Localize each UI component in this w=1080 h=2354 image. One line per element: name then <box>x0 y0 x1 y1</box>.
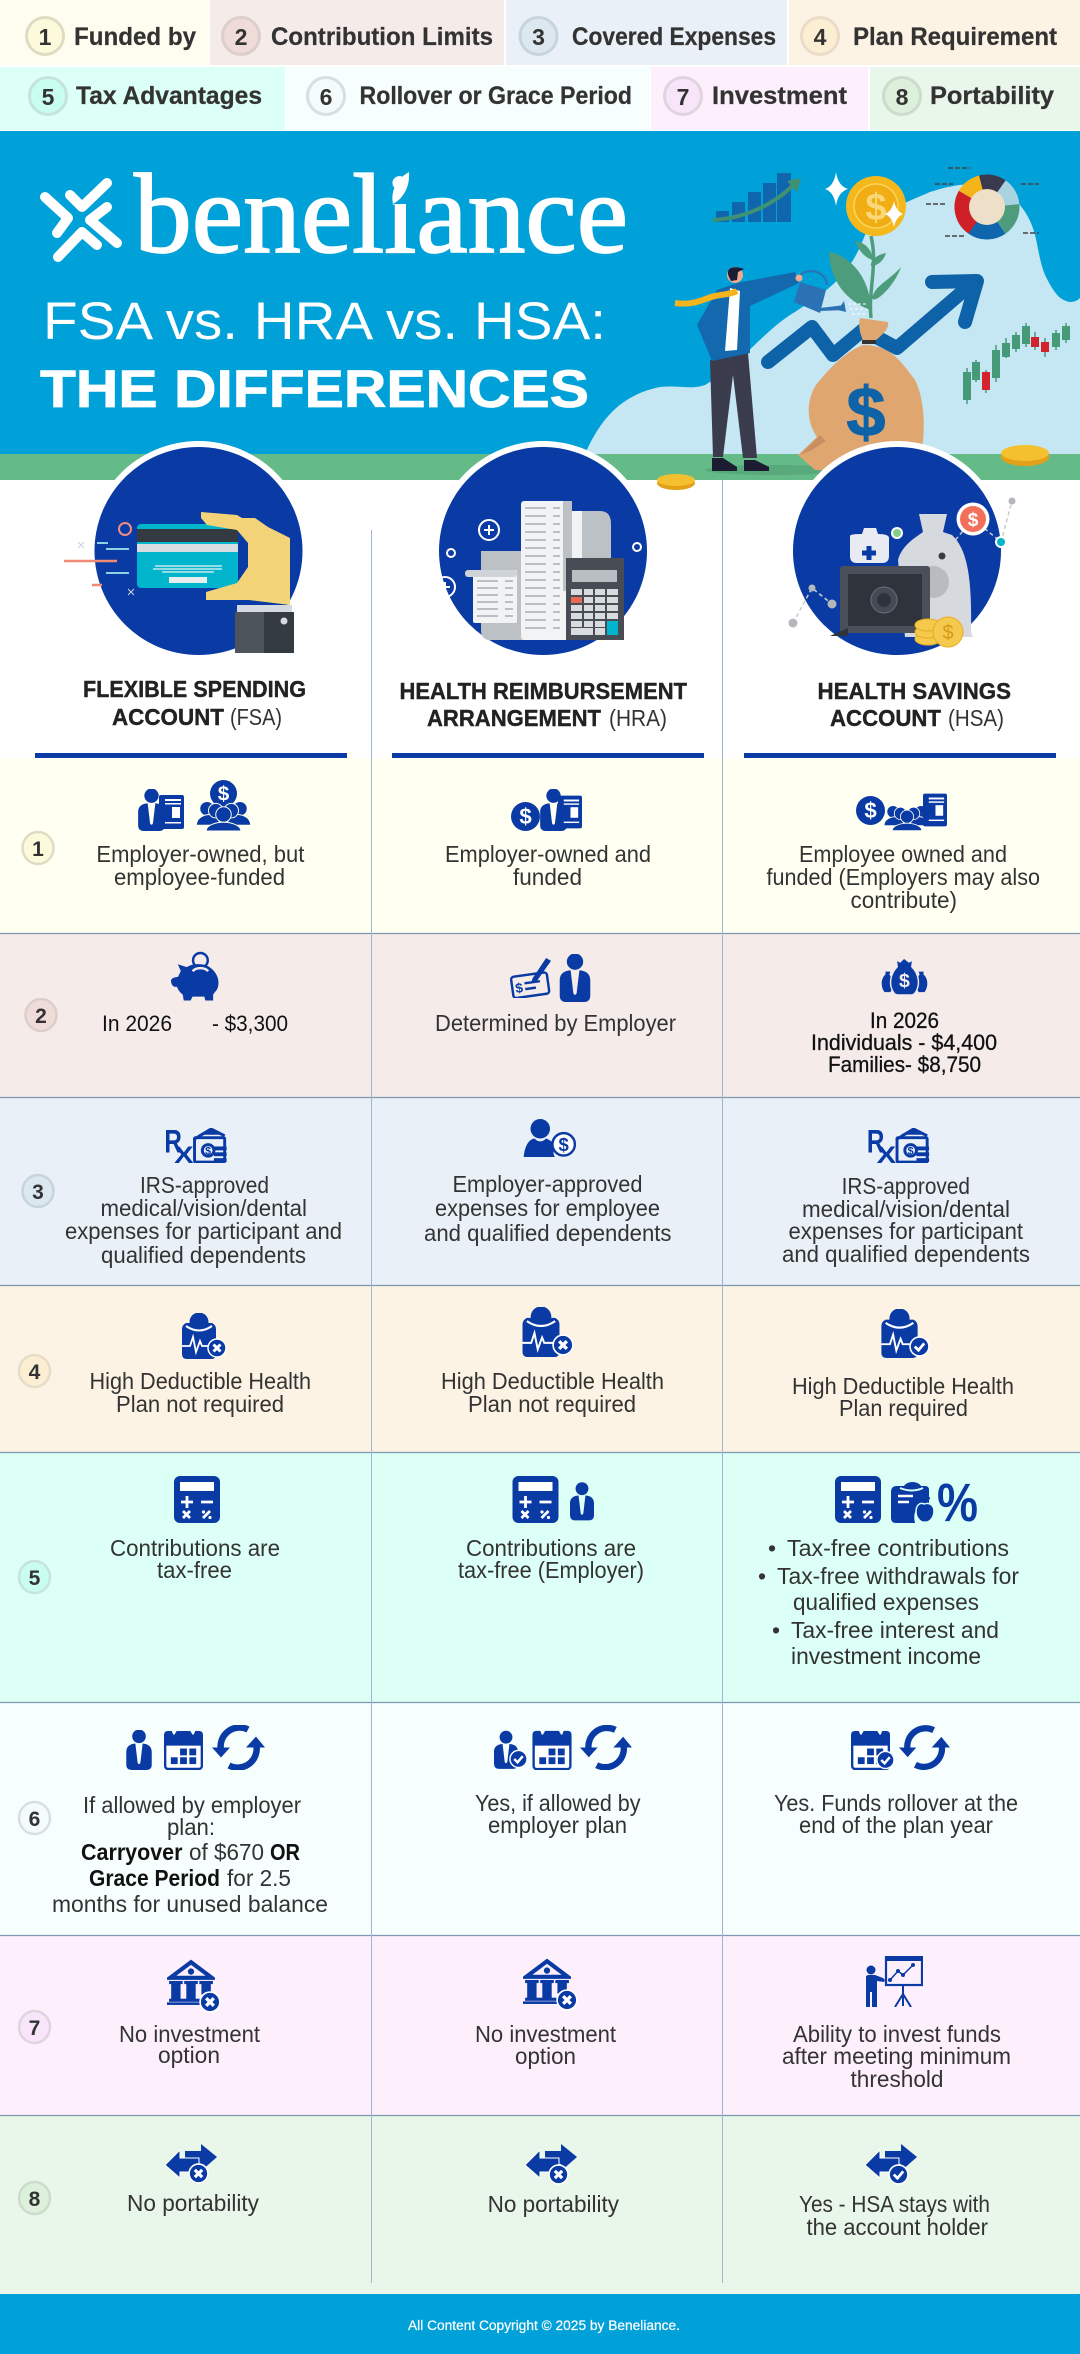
FSA plan requirement: Plan not required <box>116 1391 284 1417</box>
topic 2: contribution limits: 2 <box>235 24 247 50</box>
FSA rollover: of $670 <box>189 1839 264 1865</box>
HRA tax advantages <box>458 1476 644 1583</box>
HSA portability: Yes - HSA stays with <box>799 2191 990 2217</box>
row 6: rollover or grace period <box>19 1728 1018 1917</box>
shoes <box>712 458 769 471</box>
column heading: HRA: ARRANGEMENT <box>427 705 602 731</box>
topic 8: portability <box>870 67 1080 130</box>
HSA investment: threshold <box>850 2066 944 2092</box>
logo mark <box>45 183 117 257</box>
hand <box>796 274 802 282</box>
HSA tax advantages: • <box>772 1617 780 1643</box>
FSA investment: option <box>158 2042 220 2068</box>
HSA expenses: IRS-approved <box>842 1173 970 1199</box>
FSA rollover: OR <box>270 1839 300 1865</box>
HSA funded by: Employee owned and <box>799 841 1007 867</box>
row number 7: 7 <box>29 2017 40 2040</box>
FSA funded by <box>96 780 305 890</box>
FSA funded by: Employer-owned, but <box>96 841 305 867</box>
topic 3: covered expenses: 3 <box>532 24 545 50</box>
topic 5: tax advantages: 5 <box>42 84 55 110</box>
HRA expenses <box>424 1119 672 1246</box>
HSA plan requirement <box>792 1308 1014 1421</box>
row number 3: 3 <box>32 1181 44 1204</box>
row backgrounds <box>0 758 1080 2294</box>
watering can <box>794 271 868 314</box>
column heading: HRA <box>400 678 688 731</box>
logo leaf <box>384 172 409 204</box>
HSA tax advantages: • <box>768 1535 776 1561</box>
row 8: portability <box>19 2144 990 2240</box>
topic 6: rollover or grace period <box>286 67 650 130</box>
row 5: tax advantages <box>19 1473 1019 1669</box>
donut chart illustration <box>926 168 1039 242</box>
HSA plan requirement: Plan required <box>839 1395 968 1421</box>
row number 1 <box>22 832 54 864</box>
coin on ground <box>1001 445 1049 466</box>
FSA tax advantages <box>110 1476 280 1583</box>
gold coin on plant: $ <box>865 187 887 229</box>
FSA tax advantages: Contributions are <box>110 1535 280 1561</box>
HSA expenses: and qualified dependents <box>782 1241 1030 1267</box>
row number 1: 1 <box>32 838 44 861</box>
FSA expenses: medical/vision/dental <box>100 1195 307 1221</box>
title line 2: THE DIFFERENCES <box>40 360 589 419</box>
HSA funded by <box>766 794 1040 913</box>
HRA investment: option <box>515 2043 576 2069</box>
HSA tax advantages: investment income <box>791 1643 981 1669</box>
growth arrow <box>768 281 977 362</box>
FSA rollover: If allowed by employer <box>83 1792 301 1818</box>
HRA tax advantages: Contributions are <box>466 1535 636 1561</box>
HRA plan requirement: High Deductible Health <box>441 1368 664 1394</box>
row number 8 <box>19 2182 50 2214</box>
head <box>727 267 743 283</box>
HRA limit: Determined by Employer <box>435 1010 676 1036</box>
HRA column badge <box>433 441 653 661</box>
row number 2: 2 <box>35 1005 47 1028</box>
topic 5: tax advantages: Tax Advantages <box>76 82 262 110</box>
HSA limit <box>811 958 997 1077</box>
HRA expenses: expenses for employee <box>435 1195 660 1221</box>
HSA plan requirement: High Deductible Health <box>792 1373 1014 1399</box>
HSA funded by: funded (Employers may also <box>766 864 1040 890</box>
column heading: HSA: (HSA) <box>948 705 1004 731</box>
FSA limit: - $3,300 <box>212 1011 288 1036</box>
HSA tax advantages: Tax-free interest and <box>791 1617 999 1643</box>
topic 8: portability: Portability <box>930 82 1054 110</box>
column heading: HSA <box>818 678 1011 731</box>
topic 2: contribution limits <box>210 0 504 65</box>
row number 6: 6 <box>29 1808 40 1831</box>
FSA column badge <box>64 441 308 661</box>
FSA investment: No investment <box>119 2021 261 2047</box>
HSA limit: In 2026 <box>870 1008 939 1033</box>
HSA funded by: contribute) <box>850 887 957 913</box>
column heading: HSA: ACCOUNT <box>830 705 942 731</box>
row 7: investment <box>19 1956 1011 2092</box>
HSA portability: the account holder <box>806 2214 988 2240</box>
FSA rollover <box>52 1728 328 1917</box>
HRA plan requirement: Plan not required <box>468 1391 636 1417</box>
HSA limit: Individuals - $4,400 <box>811 1030 997 1055</box>
footer: All Content Copyright © 2025 by Beneliance. <box>408 2318 680 2333</box>
HSA investment: after meeting minimum <box>782 2043 1011 2069</box>
HSA tax advantages <box>758 1473 1019 1669</box>
HSA tax advantages: Tax-free withdrawals for <box>777 1563 1019 1589</box>
topic 1: funded by <box>0 0 209 65</box>
row 1: funded by <box>22 780 1040 913</box>
row number 5 <box>19 1561 50 1593</box>
jacket <box>697 272 799 361</box>
HSA tax advantages: Tax-free contributions <box>787 1535 1009 1561</box>
topic 4: plan requirement: Plan Requirement <box>853 23 1058 51</box>
FSA investment <box>119 1962 261 2068</box>
topic 8: portability: 8 <box>896 84 909 110</box>
HSA portability <box>799 2144 990 2240</box>
FSA rollover: for 2.5 <box>227 1865 291 1891</box>
FSA rollover: Grace Period <box>89 1865 220 1891</box>
FSA expenses: qualified dependents <box>101 1242 306 1268</box>
row number 4: 4 <box>29 1361 41 1384</box>
HSA expenses: expenses for participant <box>788 1218 1024 1244</box>
FSA rollover: Carryover <box>81 1839 183 1865</box>
money bag <box>798 318 924 475</box>
row 2: contribution limits <box>26 953 997 1077</box>
HSA expenses <box>782 1123 1030 1267</box>
FSA rollover: plan: <box>167 1814 215 1840</box>
row number 2 <box>26 999 56 1031</box>
HRA funded by <box>445 789 651 890</box>
FSA plan requirement: High Deductible Health <box>90 1368 311 1394</box>
logo wordmark: beneliance <box>134 152 628 277</box>
topic 4: plan requirement <box>789 0 1080 65</box>
topic 2: contribution limits: Contribution Limits <box>271 23 493 51</box>
sparkles <box>825 172 903 227</box>
topic 3: covered expenses <box>506 0 787 65</box>
HSA investment: Ability to invest funds <box>793 2021 1001 2047</box>
businessman <box>675 267 802 471</box>
column heading: HRA: (HRA) <box>609 705 667 731</box>
comparison table <box>0 441 1080 2294</box>
topic 1: funded by: Funded by <box>74 23 196 51</box>
row number 7 <box>19 2011 50 2043</box>
HSA tax advantages: qualified expenses <box>793 1589 979 1615</box>
HSA limit: Families- $8,750 <box>828 1052 981 1077</box>
HSA rollover: end of the plan year <box>799 1812 993 1838</box>
row 3: covered expenses <box>22 1119 1030 1268</box>
topic 7: investment: Investment <box>712 82 848 110</box>
FSA portability <box>127 2144 259 2216</box>
light hill backdrop <box>585 184 1080 454</box>
row 4: plan requirement <box>19 1306 1014 1421</box>
column heading: FSA <box>83 676 306 730</box>
row number 3 <box>22 1175 54 1207</box>
money bag: $ <box>847 373 885 451</box>
HRA expenses: and qualified dependents <box>424 1220 672 1246</box>
HRA rollover <box>475 1728 641 1838</box>
HRA plan requirement <box>441 1306 664 1417</box>
HSA column badge: $ <box>942 622 954 644</box>
topic 1: funded by: 1 <box>39 24 52 50</box>
column heading: HSA: HEALTH SAVINGS <box>818 678 1011 704</box>
HRA portability <box>488 2144 619 2217</box>
FSA plan requirement <box>90 1312 311 1417</box>
title line 1: FSA vs. HRA vs. HSA: <box>43 292 606 351</box>
topic 3: covered expenses: Covered Expenses <box>572 23 776 51</box>
row number 5: 5 <box>29 1567 41 1590</box>
trousers <box>710 353 757 458</box>
HSA tax advantages: % <box>937 1473 978 1533</box>
FSA rollover: months for unused balance <box>52 1891 328 1917</box>
row number 8: 8 <box>29 2188 41 2211</box>
topic 7: investment <box>651 67 868 130</box>
row number 6 <box>19 1802 50 1834</box>
FSA expenses: expenses for participant and <box>65 1218 342 1244</box>
HRA investment <box>475 1961 617 2069</box>
column heading: FSA: ACCOUNT <box>112 704 225 730</box>
FSA expenses: IRS-approved <box>140 1172 269 1198</box>
FSA tax advantages: tax-free <box>157 1557 232 1583</box>
column heading: FSA: (FSA) <box>230 704 282 730</box>
column heading: HRA: HEALTH REIMBURSEMENT <box>400 678 688 704</box>
header banner <box>0 131 1080 480</box>
footer <box>0 2294 1080 2354</box>
HRA portability: No portability <box>488 2191 619 2217</box>
HRA rollover: Yes, if allowed by <box>475 1790 641 1816</box>
topic 4: plan requirement: 4 <box>814 24 827 50</box>
FSA limit: In 2026 <box>102 1011 172 1036</box>
HSA rollover <box>774 1728 1018 1838</box>
gold coin on plant <box>846 176 906 236</box>
FSA portability: No portability <box>127 2190 259 2216</box>
HRA tax advantages: tax-free (Employer) <box>458 1557 644 1583</box>
HRA funded by: funded <box>513 864 582 890</box>
HRA limit <box>435 953 676 1036</box>
HRA funded by: Employer-owned and <box>445 841 651 867</box>
HSA investment <box>782 1956 1011 2092</box>
HSA rollover: Yes. Funds rollover at the <box>774 1790 1018 1816</box>
candlestick chart illustration <box>963 323 1070 404</box>
tie <box>675 291 737 304</box>
row number 4 <box>19 1355 50 1387</box>
plant <box>829 236 901 318</box>
green ground <box>0 454 1080 480</box>
topic strip <box>0 0 1080 130</box>
topic 5: tax advantages <box>0 67 285 130</box>
HRA investment: No investment <box>475 2021 617 2047</box>
column heading: FSA: FLEXIBLE SPENDING <box>83 676 306 702</box>
HSA column badge: $ <box>968 510 979 531</box>
HSA expenses: medical/vision/dental <box>802 1196 1010 1222</box>
FSA expenses <box>65 1123 342 1268</box>
HRA expenses: Employer-approved <box>452 1171 642 1197</box>
topic 7: investment: 7 <box>677 84 689 110</box>
HSA tax advantages: • <box>758 1563 766 1589</box>
HRA rollover: employer plan <box>488 1812 627 1838</box>
shirt <box>725 288 740 351</box>
HSA column badge <box>787 441 1016 661</box>
topic 6: rollover or grace period: Rollover or Grace Period <box>360 82 632 110</box>
topic 6: rollover or grace period: 6 <box>320 84 332 110</box>
gold coin near HRA badge <box>657 474 695 490</box>
FSA funded by: employee-funded <box>114 864 285 890</box>
FSA limit <box>102 953 288 1036</box>
bar chart illustration <box>713 173 801 222</box>
